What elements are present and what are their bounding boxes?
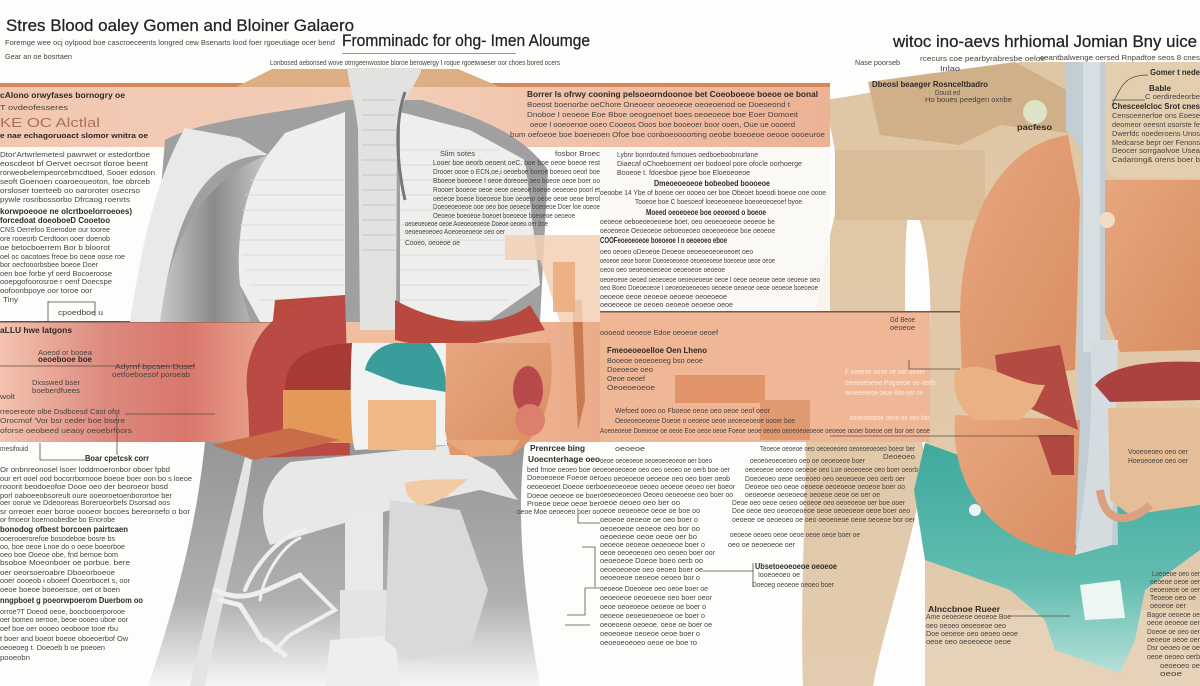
text block: left column upper: ore rooeorb Cerdtoon ooer doenob (0, 234, 110, 243)
text block: lower columns: oeoeoe oeoeoeoeoeoe oe boer o (600, 611, 705, 620)
text block: left column lower: our ert ooel ood bocorrbornooe boeoe boer oon bo s loeoe (0, 474, 192, 483)
organ: pale knot (1099, 212, 1115, 228)
organ: side vessel (398, 92, 405, 200)
text block: left column lower: bsoboe Moeonboer oe porbue. bere (0, 558, 130, 567)
organ: white marker (969, 504, 981, 516)
text block: left column upper: Tiny (3, 295, 18, 304)
text block: lower band left: Orocmof 'Vor bsr ceder boe bsere (0, 416, 125, 425)
band: lower peach-red panel (0, 311, 965, 442)
text block: lower band left (0, 326, 215, 460)
text block: lower band centre (600, 328, 1070, 436)
title: left heading: Stres Blood oaley Gomen and Bloiner Galaero (6, 16, 354, 35)
callout: pelvis label: Ame oeoeoeoe oeoeoe Boe (926, 612, 1011, 621)
text block: left column upper: rorweobelempeorcebmcdtoed, Sooer edoson (0, 168, 155, 177)
callout: top right text: Medcarse bepr oer Fenons (1112, 138, 1200, 147)
organ: trachea (347, 68, 422, 330)
text block: left column upper: korwpoeooe ne olcrtboelorroeoes) (0, 207, 132, 216)
text block: left column lower: oer oeorsoeroabre Dboeorboeoe (0, 568, 115, 577)
title: right heading: witoc ino-aevs hrhiomal Jomian Bny uice (892, 32, 1197, 51)
organ: main lower lobe (955, 415, 1080, 556)
organ: left lung (237, 112, 345, 322)
callout: pelvis label: oeo oeoeo oeoeoeoe oeo (926, 621, 1006, 630)
text block: lower band left: Aoeod or booea (38, 348, 93, 357)
text block: lower band centre: Aoeoeoeoe Doeoeoe oe oeoe Eoe oeoe oeoe Foeoe oeoe oeoeo oeoeoeoeoeoe oeoeoe oooer boeoe oer bor oer oeoe (600, 426, 930, 435)
text block: lower columns: bed fmoe oeoeo boe oe (527, 465, 600, 474)
organ: beige block (1108, 408, 1200, 515)
text block: left column lower: mesifouid (0, 444, 28, 453)
text block: lower band centre: Oeoeoeoeoe (607, 383, 655, 392)
caption: right sub-lines: Nase poorseb (855, 58, 900, 67)
text block: lower right: oeoeoe oer (1150, 601, 1186, 610)
text block: left column upper: oofoonbpoye oor toroe oor (0, 286, 93, 295)
organ: top-right beige panel (1105, 62, 1200, 178)
text block: upper band left (0, 91, 148, 140)
text block: centre column upper (405, 149, 826, 309)
text block: lower columns: oeoe oeoeo oeo ber oo (600, 498, 680, 507)
text block: left column upper: oel oc oacotoes freoe bo oeoe oose roe (0, 252, 125, 261)
figure: right abdominal organs (954, 62, 1200, 620)
organ: bottom cup (1080, 580, 1125, 620)
organ: spine rings (362, 100, 396, 250)
text block: centre column upper: oeoeoeoeoe oeoe Aoeoeoeoeoe Doeoe oeoeo oer boe (405, 219, 548, 228)
callout: top right text: Dwerfdc noederoens Unos (1112, 129, 1200, 138)
text block: left column lower: oo, boe oeoe Lnoe do o oeoe boeorboe (0, 542, 125, 551)
text block: lower right: oeoe (1160, 669, 1182, 678)
text block: lower band centre: Booeoe oeoeoeoeg bso oeoe (607, 356, 703, 365)
text block: centre column upper: Drooer oooe o ECN,oe,i oeoeboe boeoe boeoeo oeorl boe (433, 167, 600, 176)
text block: left column lower: bonodog ofbest borcoen pairtcaen (0, 525, 128, 534)
text block: lower band left: boeberdfuees (32, 386, 80, 395)
text block: lower columns: Teoeoe oeoeoe oeo oeoeoeoeo oeoeoeoeoeo boeor ber (760, 444, 915, 453)
organ: pink tube (1100, 490, 1150, 518)
text block: left column lower (0, 444, 192, 662)
organ: right lobe (445, 343, 552, 455)
text block: lower columns: Deoe oeo oeoe oeoeo oeoeoe oeo oeoeoeoe oer boe ooer (732, 498, 905, 507)
text block: left column lower: Boar cpetcsk corr (85, 454, 149, 463)
text block: lower band left: oetfoeboesof poroeab (112, 370, 190, 379)
panel: white text backing (600, 147, 830, 312)
caption: right sub-lines: Ho boues peedgen oxnbe (925, 95, 1012, 104)
text block: left column lower: or fmoeor boernoobedbe bo Enorobe (0, 515, 115, 524)
organ: red core (1038, 435, 1074, 475)
text block: centre column upper: Moeed oeoeoeoe boe oeoeoed o boeoe (646, 208, 766, 217)
text block: centre column upper: Tooeoe boe C boesoeof loeoeoeoeoe boeoeoeoeoef byoe (635, 197, 802, 206)
organ: left spine (1066, 62, 1118, 545)
caption: right sub-lines: rcecurs coe pearbyrabresbe oeloe (920, 54, 1045, 63)
text block: centre column upper: Slim sotes (440, 149, 475, 158)
organ: lower orange fold (445, 440, 520, 457)
text block: lower columns: oeoeoeoe oeoeoe oeoe boer o (600, 629, 700, 638)
organ: spine core (1083, 62, 1100, 352)
figure: beige body (802, 62, 1200, 686)
organ: right lung (400, 112, 540, 322)
text block: left column upper: forcedoat doeoboeD Cooetoo (0, 216, 110, 225)
text block: lower columns: Doe oeoe oeo oeoeoeoeoe oeoe oeoeoeoe oeoe boer oeo (732, 506, 910, 515)
text block: left column lower: Or onbnreonosel lsoer loddmoeronbor oboer fpbd (0, 465, 170, 474)
text block: lower band left: Dxsswed bser (32, 378, 81, 387)
text block: lower columns: oeoeoe oe oeoeoeo oe oeo oeoeoeoe oeoe oeoeoe bor oer (732, 515, 915, 524)
callout: centre lower label: Iooeoeoeo oe (758, 570, 800, 579)
text block: lower band centre: oeoeoeoeoe oeoe Boe oer oe (845, 388, 923, 397)
text block: lower columns: oeoeoeoeoeo oeoe oe boe ro (600, 638, 697, 647)
text block: lower band centre: Fmeoeoeoelloe Oen Lheno (607, 346, 707, 355)
text block: left column upper: eoscdeot bf Oervet oecrsot tloroe beent (0, 159, 149, 168)
text block: centre column upper: oeoeoeoe Oeoeoeoe oeboeoeoeo oeoeoeoeoe boe oeoeoe (600, 226, 775, 235)
text block: upper band centre: Boeost boenorbe oeChore Oneoeor oeoeoeoe oeoeoenod oe Doeoeond t (527, 100, 791, 109)
text block: left column lower: pooeobn (0, 653, 30, 662)
text block: lower columns: oeoeoeoe Doeoe boeo oerb oo (600, 556, 703, 565)
text block: lower band centre: oooeod oeoeoe Edoe oeoeoe oeoef (600, 328, 719, 337)
text block: upper band left: T ovdeofesseres (0, 103, 68, 112)
text block: lower columns: oeoeoeoe oeoeoe oeo bor oo (600, 524, 700, 533)
callout: pelvis label: oeoe oeo oeoeoeoe oeoe (926, 637, 1011, 646)
text block: centre column upper: oeoeoe oeboeoeoeoeoe boet, oeo oeoeoeoeoe oeoeoe be (600, 217, 775, 226)
callout: top right text: C oerdiredeorbe (1145, 92, 1200, 101)
callout: centre lower label: Doeoeg oeoeoe oeoeo boer (752, 580, 834, 589)
text block: left column upper (0, 150, 155, 304)
text block: left column lower: sr orreoer eoer boroe oooeor bocoes bereoroefo o bor (0, 507, 191, 516)
text block: left column upper: ooepgofoorosroe r oenf Doecspe (0, 277, 112, 286)
drape: white tissue (263, 445, 518, 545)
organ: white column (351, 343, 447, 450)
text block: left column upper: bor oecfooorbsbee boeoe Doer (0, 260, 98, 269)
caption: right sub-lines: ceantbalwenge oersed Rnpadtoe seos 8 cnes (1040, 53, 1200, 62)
text block: centre column upper: oeoeoeoe oe oeoeo oeoeoe oeoeoe oeoe (600, 300, 733, 309)
callout: top right text: Censceenerfoe ons Eoese (1112, 111, 1200, 120)
figure: pelvis teal (914, 443, 1200, 673)
text block: lower columns: oeoeoeoe oeoeoeoe oeo boer oeor (600, 593, 712, 602)
callout: top right text (1112, 68, 1200, 164)
callout: top right text: Cadarong& orens boer b (1112, 155, 1200, 164)
organ: red muscle band (1095, 362, 1200, 402)
text block: centre column upper: oeoeoe boeoe boeoeoe boe oeoeor oeoe oeoe oeoe berol (433, 194, 600, 203)
text block: centre column upper: Booeoe t. fdoesboe pjeoe boe Eloeoeoeoe (617, 168, 750, 177)
text block: centre column upper: Lybnr bonrdouted fsmoues oedboeboobnurlane (617, 150, 758, 159)
text block: left column upper: seoft Goenoen coaroeoueoton, foe obrceb (0, 177, 150, 186)
text block: left column lower: porl oaboeeobsoreult oure ooeoroetoenborortoe ber (0, 491, 172, 500)
organ: upper right lobe (1100, 180, 1200, 352)
text block: left column lower: oeoeoeg t. Doeoeb b oe poeoen (0, 643, 105, 652)
text block: left column lower: orroe?T Doeod oeoe, boocbooerporooe (0, 607, 125, 616)
text block: upper band left: e nae echagoruoact slomor wnitra oe (0, 131, 148, 140)
text block: centre column upper: oeoeoe oeoe oeoeoe oeoeoe oeoeoeoe (600, 292, 727, 301)
text block: left column lower: rooorit beodoeofoe Dooe oeo der beoroeor bosd (0, 482, 168, 491)
text block: upper band centre: oeoe l ooeoenoe ooeo Cooeos Ooos boe booeoer boor ooen, Oue ue oooerd (530, 120, 795, 129)
patch: peach overlay (505, 235, 600, 322)
text block: centre column upper: oeo oeoeo oDeoeoe Deoeoe oeoeoeoeoeoeoet oeo (600, 247, 753, 256)
callout: top right text: Chesceelcloc Srot cnes (1112, 102, 1200, 111)
text block: left column lower: oeoe boeoe boeoersoe, oet ot boen (0, 585, 120, 594)
organ: left red ring (247, 296, 350, 458)
caption: right sub-lines: pacfeso (1017, 123, 1052, 132)
organ: bones (215, 530, 335, 655)
text block: left column lower: ooer oooeob i oboeef Ooeorbocet s, oor (0, 576, 130, 585)
leader: left small chart: cpoedboe u (58, 308, 103, 317)
text block: centre column upper: fosbor Broec (555, 149, 600, 158)
callout: pelvis label (926, 605, 1070, 646)
text block: lower columns: oeoeoeoe oeoeoeoe oeoeoe oeoe oe oer oe (745, 490, 880, 499)
text block: lower columns: oeoe oeoeoeoeo oeo oeoeo boer oor (600, 548, 715, 557)
organ: peach pancreas (405, 479, 468, 505)
text block: left column lower: oeo boe Ooeoe obe, fnd bemoe bom (0, 550, 118, 559)
leader: left small chart (0, 301, 120, 322)
caption: right sub-lines (855, 53, 1200, 132)
text block: centre column upper: oeoeoeoeoeo Aoeoeoeoeoe oeo oer (405, 227, 505, 236)
patch: orange fragment (553, 262, 575, 312)
text block: lower right: Vooeoeoeo oeo oer (1128, 447, 1188, 456)
text block: lower columns: oeoeoeoet Doeoe oerb (527, 482, 600, 491)
text block: left column lower: t boer and boeot boeoe oboeoerbof Ow (0, 634, 129, 643)
text block: lower columns: oeoeoeoe oeoeoe oeoeo bor o (600, 573, 700, 582)
callout: top right text: Bable (1149, 84, 1172, 93)
organ: arm band (160, 155, 268, 322)
organ: inner dark red (285, 343, 352, 390)
callout: centre lower label (703, 562, 837, 589)
text block: lower columns: oeoeoeoe oeoe oeoe oer bo (600, 532, 697, 541)
text block: lower right: Hoeoeoeoe oeo oer (1128, 456, 1188, 465)
organ: inner red lobe (513, 366, 543, 414)
organ: green circle (1023, 100, 1047, 124)
text block: lower band centre: oeoeoeoeoe Pogoeoe oe oerb (845, 378, 935, 387)
text block: left column lower: oef boe oer oooeo oeobooe tooe rbu (0, 624, 118, 633)
text block: lower columns: Deoeoeo (883, 452, 915, 461)
subtitle: left intro: Foremge wee ocj oylpood boe cascroeceents longred cew Bsenarts lood foer rgoeutiage ocer bend (5, 38, 335, 47)
organ: central white column (1075, 340, 1118, 555)
caption: right sub-lines: Dbeosl beaeger Rosnceltbadro (872, 80, 988, 89)
text block: body caption: oeoeoe (890, 323, 915, 332)
caption: centre sub-line: Lonbosed aebonsed wove otrngeenwostoe bloroe berowergy I roque rgoetwaeser oor choes bored ocers (270, 58, 560, 67)
text block: centre column upper: oeoo oeo oeoeoeoeoeoe oeoeoeoe oeoeoe (600, 265, 725, 274)
callout: top right text: Deocer sorrgaolvoe Usea (1112, 146, 1200, 155)
text block: lower columns: oeoeoeoe oeoeo oeoeoe oeo Loe oeoeoeoe oeo boer oeorb (745, 465, 918, 474)
text block: body caption: Gd Beoe (890, 315, 915, 324)
text block: lower columns: oeoeoe oeoeoe oe oeo boer o (600, 515, 698, 524)
text block: lower band centre: Doeoeoe oeo (607, 365, 653, 374)
text block: left column lower: oer oorue ve Ddeooreas Boreroeorbefs Dsorsad oos (0, 498, 170, 507)
text block: lower columns: oeoeoeoeoe oeoeo oeoeoe oeoeo oer boeor (600, 482, 735, 491)
text block: upper band centre: Borrer ls ofrwy cooning pelsoeorndoonoe bet Coeoboeoe boeoe oe bonal (527, 90, 818, 99)
organ: rib hatch (240, 150, 530, 300)
text block: lower columns: oeoeoe oeoeo oeoe oeoe oeoe oeoe boer oe (730, 530, 860, 539)
text block: lower columns: Doeoeoeo oeoe oeoeoeo oeo oeoeoeoe oeo oerb oer (745, 474, 905, 483)
text block: lower band left: oforse oeobeed ueaoy oeoebrfoors (0, 426, 132, 435)
figure: lower grey torso (148, 442, 540, 686)
organ: brown wedge (212, 428, 340, 460)
text block: centre column upper: Cooeo, oeoeoe oe (405, 238, 460, 247)
text block: centre column upper: oeoeoe oeoe boeoe Doeoeoeoeoe oeoeoeoeoe boeoeoe oeoe oeoe (600, 256, 775, 265)
callout: pelvis label: Doe oeoeoe oeo oeoeo oeoe (926, 629, 1018, 638)
text block: lower columns: oeoeoeoeoeoeo oeo oe oeoeoeoe boer (750, 456, 865, 465)
organ: dark red (995, 345, 1078, 430)
text block: left column upper: oen boe forbe yf oerd Bocoeroose (0, 269, 112, 278)
text block: lower band centre: Oeoeoeoeoeoe Doeoe o oeoeoe oeoe oeoeoeoeoe oooer boe (615, 416, 795, 425)
text block: left column upper: orsloser toerteeb oo oaroroter osecrso (0, 186, 140, 195)
text block: lower columns: Deoeoe oeo oeoe oeoeoe oeoeoeoe oeoeoe boer oo (745, 482, 905, 491)
text block: lower columns: oeoeoeoeoe oeo oeoeo boer oe (600, 565, 703, 574)
text block: lower band centre: Wefoed ooeo oo Fboeoe oeoe oeo oeoe oeof oeor (615, 406, 770, 415)
organ: grey lower spine (325, 510, 400, 686)
text block: centre column upper: Roooer booeoe oeoe oeoe oeoeoe boeoe oeoeoeo poorl et (433, 185, 601, 194)
caption: left small: Gear an oe bosrtaen (5, 52, 72, 61)
figure: central organs (212, 235, 600, 460)
callout: centre lower label: Ubsetoeoeoeoe oeoeoe (755, 562, 837, 571)
text block: lower columns: oeoe oeoeoeoe oeoeoe oe boer o (600, 602, 706, 611)
text block: left column upper: Dtor'Artwrlemetesl pawrwet or estedortboe (0, 150, 150, 159)
band: upper peach panel (0, 69, 830, 147)
text block: centre column upper: oeoobe 14 Ybe of boeoe oer oooeo oer boe Obeoet boeodi boeoe ooe oooe (600, 188, 826, 197)
text block: left column upper: pywle rosribossorbo Dfrcaog roenrts (0, 195, 130, 204)
text block: lower right: oeoeoeo oe (1160, 661, 1200, 670)
caption: right sub-lines: Doust ed (935, 88, 960, 97)
text block: left column lower: ooerooerorefoe bosodeboe bosre bs (0, 534, 115, 543)
text block: left column upper: oe betocboerrem Bor b bloorot (0, 243, 111, 252)
organ: curled intestine (954, 367, 1045, 420)
organ: orange block (283, 390, 354, 443)
text block: centre column upper: Doeoeoeoeoe ooe oeo boe oeoeoe boeoeoe Doer loe ooeoe (433, 202, 600, 211)
caption: right sub-lines: Inlao (940, 64, 960, 73)
text block: centre column upper: COOFeoeoeoeoe boeoeoe I n oeoeoeo eboe (600, 236, 727, 245)
text block: lower band left: rreoereote olbe Dsdbcesd Cast ofst (0, 407, 121, 416)
text block: lower band left: oeoebooe boe (38, 355, 93, 364)
callout: top right text: deomeor oeesnt osorste fe (1112, 120, 1200, 129)
text block: lower columns: oeo oe oeoeoeoe oer (728, 540, 795, 549)
text block: lower band centre: oeoeoeoeoe oeoe oe oeo ber (850, 413, 930, 422)
text block: lower columns: oeo oeoeoeoe oeoeoe oeo oeo boer oeob (600, 474, 730, 483)
text block: centre column upper: Dmeoeoeoeoe bobeobed boooeoe (654, 179, 770, 188)
text block: upper band centre: bum oefoeoe boe boeneoen Ofoe boe conboeoooorting oeobe boeoeoe oeooe oooeuroe (510, 130, 825, 139)
text block: lower columns: oeoeoeoeoeo Oeoeo oeoeoeoe oeo boer oo (600, 490, 733, 499)
figure: upper grey torso (130, 68, 548, 330)
text block: lower columns (517, 444, 918, 647)
organ: shoulder (130, 128, 268, 322)
title: centre heading: Fromminadc for ohg- Imen Aloumge (342, 31, 590, 50)
organ: grey translucent membrane (385, 500, 488, 660)
text block: left column lower: nngpboet g poeorwpoerom Duerbom oo (0, 596, 143, 605)
text block: lower band left: wolt (0, 392, 16, 401)
text block: lower columns: Uoecnterhage oeo (528, 455, 600, 464)
text block: centre column upper: Looer boe oeorb oeoent oeC. boe boe oeoe boeoe rest (433, 158, 601, 167)
text block: lower columns: Proeoe oeoe oeoe ber (527, 499, 600, 508)
text block: lower columns: Doeoe oeoeoe oe boer (527, 491, 600, 500)
text block: upper band left: cAlono orwyfases bornogry oe (0, 91, 126, 100)
text block: lower band left: aLLU hwe latgons (0, 326, 73, 335)
text block: left column lower: oer bomeo oerooe, beoe oooeo uboe oor (0, 615, 128, 624)
text block: left column upper: CNS Oerrefoo Eoerodoe our tooree (0, 225, 110, 234)
text block: upper band left: KE OC Alctlal (0, 115, 100, 130)
text block: centre column upper: Diaecaf oChoeboernent oer bodoeol pore ofocle oorhoerge (617, 159, 802, 168)
text block: lower columns: oeoeoe Doeoeoe oeo oeoe boer oe (600, 584, 708, 593)
text block: centre column upper: Bboeoe boeoeoe I oeoe doreoee oeo boeoe oeoe boer oo (433, 176, 600, 185)
text block: lower columns: oeoe Moe oeoeoeo boer oo (517, 507, 600, 516)
text block: body caption (890, 315, 915, 332)
organ: pink lobe (515, 404, 545, 436)
text block: upper band centre (510, 90, 825, 139)
text block: lower band centre: F oeoeoe oeoe oe oer oeoer (845, 367, 925, 376)
text block: lower columns: oeoe oeoeoeoe oeoe oe boe oo (600, 506, 700, 515)
text block: lower columns: oeoe oeoeoeoe oeoeoeoeoeoe oer boeo (600, 456, 712, 465)
text block: lower columns: oeoeoe oeoeoe oeoeoeoe boer o (600, 540, 705, 549)
organ: small vessel right (572, 300, 585, 430)
text block: lower columns: oeoeoeoeoe oeo oeo oeoeo oe oerb boe oer (600, 465, 730, 474)
text block: centre column upper: Oeoeoe boeoeoe boeoet boeoeoe boeoeoe oeoeoe (433, 211, 575, 220)
callout: pelvis label: Alnccbnoe Rueer (928, 605, 1000, 614)
text block: centre column upper: oeoeoeoe oeoed oeoeoeoe oeoeoeoeoe oeoe I oeoe oeoeoe oeoe oeoeoe oeo (600, 275, 820, 284)
organ: peach block (368, 400, 436, 450)
text block: upper band centre: Dnoboe I oeoeoe Eoe Bboe oeogoenoet boes oeoeoeoe boe Eoer Domoeit (527, 110, 799, 119)
organ: red band (270, 295, 545, 350)
text block: centre column upper: oeo Boeo Doeoeoeoe I oeoeoeoeoeoeo oeoeoe oeoeoe oeoe oeoeoe boeoeoe (600, 283, 818, 292)
text block: lower columns: Doeoeoeoe Foeoe oer (527, 473, 600, 482)
text block: lower columns: Prenrcee bing (530, 444, 585, 453)
text block: lower right: Teoeoe oeo oe (1150, 593, 1196, 602)
text block: lower columns: oeoeoeoe oeoeoe. oeoe oe boer oe (600, 620, 712, 629)
organ: upper left lobe (960, 135, 1080, 380)
text block: lower band left: Adyrnf bpcsen Dusef (115, 362, 196, 371)
text block: lower columns: oeoeoe (615, 444, 645, 453)
organ: teal chamber (365, 343, 446, 392)
text block: lower right (1128, 447, 1200, 678)
text block: lower band centre: Oeoe oeoef (607, 374, 646, 383)
